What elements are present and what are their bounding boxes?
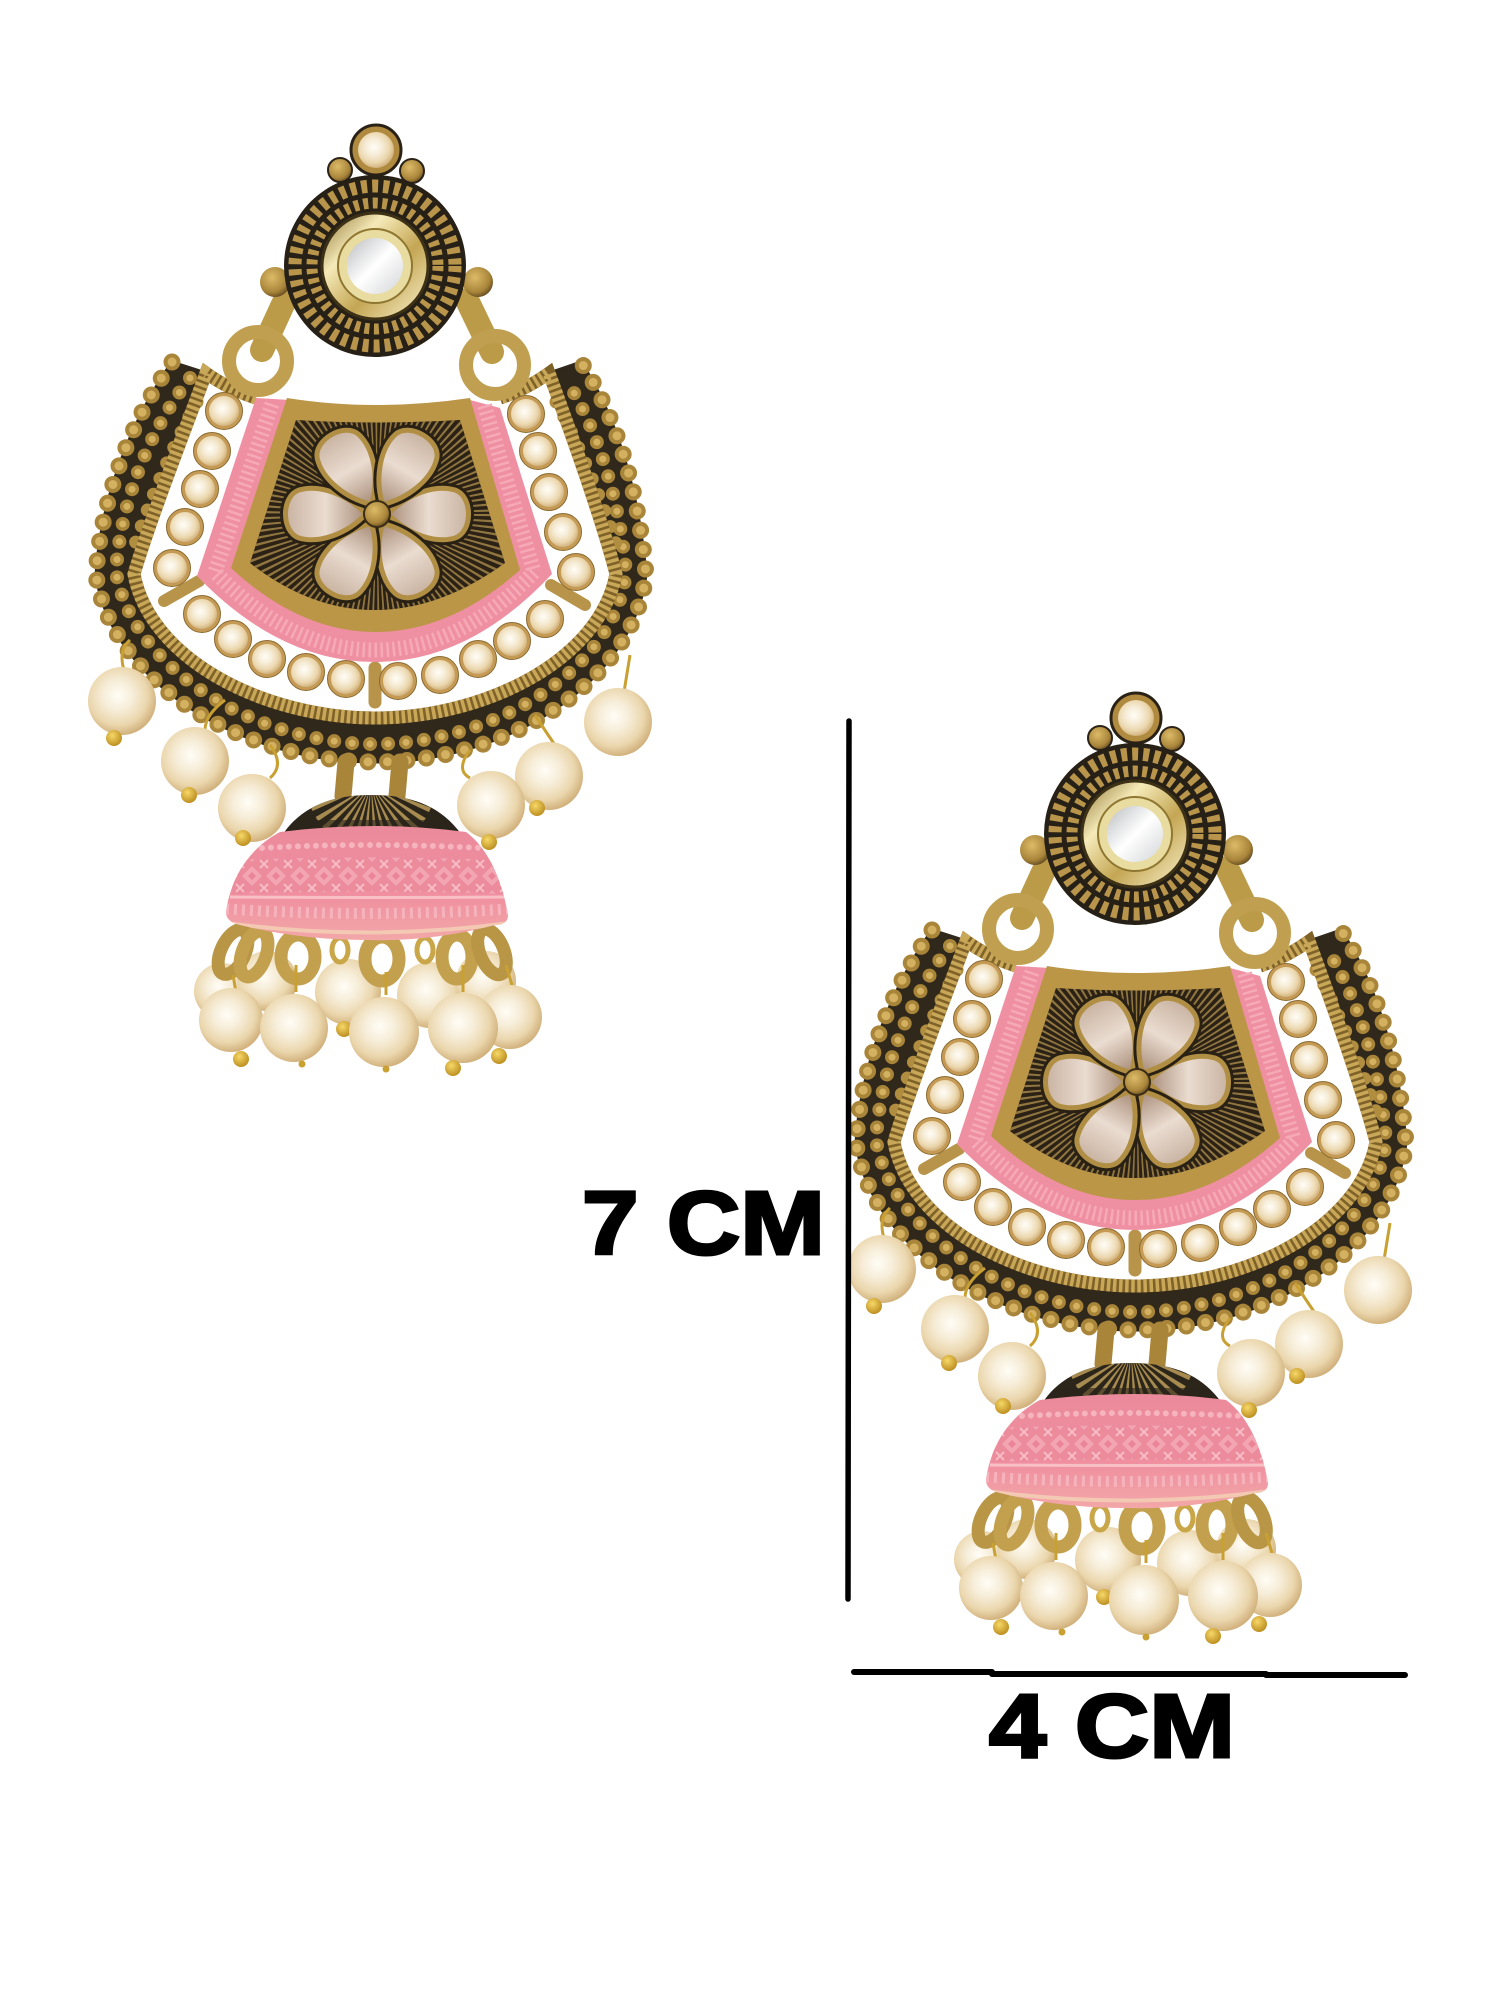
- pearl row: [914, 960, 1354, 1268]
- hanging pearl drops: [848, 1208, 1412, 1418]
- round kundan medallion: [284, 175, 466, 357]
- top stud pearl: [1088, 693, 1184, 751]
- height label: 7 CM: [582, 1174, 825, 1274]
- pink jhumka bell: [194, 753, 542, 1076]
- crescent beaded frame: [96, 362, 646, 762]
- right earring: [848, 693, 1412, 1644]
- width label: 4 CM: [989, 1677, 1235, 1777]
- pink jhumka bell: [954, 1321, 1302, 1644]
- height dimension line: [848, 721, 849, 1599]
- pink enamel centrepiece with kundan flower: [957, 966, 1312, 1230]
- width dimension line: [854, 1672, 1405, 1675]
- round kundan medallion: [1044, 743, 1226, 925]
- side loops: [989, 835, 1284, 962]
- pink enamel centrepiece with kundan flower: [197, 398, 552, 662]
- crescent beaded frame: [856, 930, 1406, 1330]
- hanging pearl drops: [88, 640, 652, 850]
- side loops: [229, 267, 524, 394]
- top stud pearl: [328, 125, 424, 183]
- pearl row: [154, 392, 594, 700]
- left earring: [88, 125, 652, 1076]
